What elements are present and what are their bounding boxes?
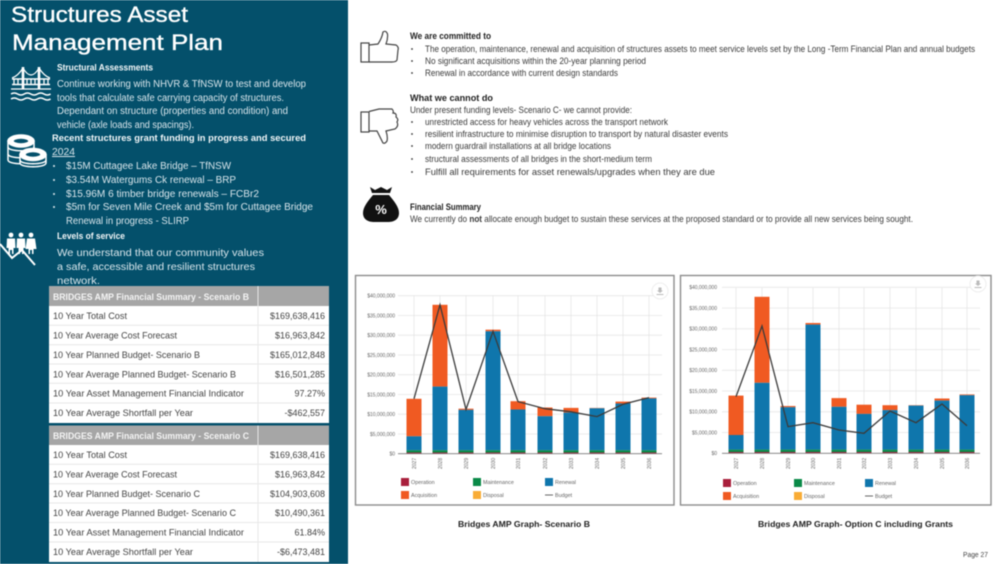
stacked bars xyxy=(406,305,656,454)
x axis years: 2031 xyxy=(837,458,843,469)
text block: what we cannot do: Fulfill all requirements for asset renewals/upgrades when they are due xyxy=(425,167,715,177)
table: scenario B financial summary xyxy=(49,286,329,423)
x axis years: 2035 xyxy=(621,458,627,469)
stacked bars xyxy=(728,297,974,453)
text block: grant funding: $15.96M 6 timber bridge renewals – FCBr2 xyxy=(66,189,259,200)
legend: Acquisition xyxy=(733,494,759,500)
x axis years: 2034 xyxy=(914,458,920,469)
table: scenario B financial summary: $169,638,416 xyxy=(270,311,325,321)
text block: grant funding: Recent structures grant funding in progress and secured xyxy=(52,133,306,144)
table: scenario B financial summary: BRIDGES AMP Financial Summary - Scenario B xyxy=(53,292,249,303)
text block: what we cannot do: modern guardrail installations at all bridge locations xyxy=(425,141,611,151)
table: scenario B financial summary: 10 Year Total Cost xyxy=(53,311,128,321)
title: Structures Asset xyxy=(11,2,189,27)
text block: structural assessments xyxy=(57,62,306,131)
table: scenario C financial summary: 10 Year Average Cost Forecast xyxy=(53,470,177,480)
text block: grant funding: Renewal in progress - SLIRP xyxy=(66,216,189,227)
page number: Page 27 xyxy=(963,552,988,559)
y axis labels: $40,000,000 xyxy=(689,285,717,291)
budget line xyxy=(414,305,649,417)
legend xyxy=(401,478,576,499)
legend: Budget xyxy=(555,493,573,499)
icon: download button xyxy=(652,283,668,299)
text block: grant funding xyxy=(52,133,313,227)
table: scenario B financial summary: 10 Year Planned Budget- Scenario B xyxy=(53,350,200,360)
title: Management Plan xyxy=(12,30,223,55)
y axis labels: $30,000,000 xyxy=(689,327,717,333)
legend: Disposal xyxy=(483,493,504,499)
legend: Maintenance xyxy=(804,481,835,487)
legend: Operation xyxy=(411,480,435,486)
text block: financial summary xyxy=(410,202,913,224)
icon: money bag with percent: % xyxy=(375,202,387,217)
text block: financial summary: We currently do not allocate enough budget to sustain these services at the proposed standard or to provide all new services being sought. xyxy=(410,214,913,224)
x axis years: 2029 xyxy=(786,458,792,469)
y axis labels: $5,000,000 xyxy=(370,432,395,438)
text block: structural assessments: Structural Assessments xyxy=(57,62,153,74)
icon: coins xyxy=(8,135,46,167)
text block: what we cannot do: What we cannot do xyxy=(410,93,493,104)
table: scenario C financial summary: 10 Year Total Cost xyxy=(53,450,128,460)
text block: what we cannot do: resilient infrastructure to minimise disruption to transport by natural disaster events xyxy=(425,129,728,139)
x axis years: 2029 xyxy=(464,458,470,469)
icon: download button xyxy=(970,276,986,292)
table: scenario C financial summary: $104,903,608 xyxy=(270,489,325,499)
x axis years: 2030 xyxy=(811,458,817,469)
x axis years: 2031 xyxy=(516,458,522,469)
icon: thumbs down xyxy=(361,109,398,143)
legend: Operation xyxy=(733,481,757,487)
x axis years xyxy=(412,458,653,469)
text block: financial summary: Financial Summary xyxy=(410,202,482,213)
y axis labels xyxy=(367,294,395,458)
text block: structural assessments: Dependant on structure (properties and condition) and xyxy=(57,106,288,117)
text block: levels of service: Levels of service xyxy=(57,231,125,242)
table: scenario B financial summary: 10 Year Average Shortfall per Year xyxy=(53,408,193,418)
icon: bridge xyxy=(11,67,51,100)
icon: thumbs up xyxy=(361,31,398,62)
text block: structural assessments: tools that calculate safe carrying capacity of structures. xyxy=(57,93,284,104)
x axis years: 2032 xyxy=(543,458,549,469)
table: scenario C financial summary: 10 Year Average Planned Budget- Scenario C xyxy=(53,508,236,518)
text block: grant funding: $5m for Seven Mile Creek and $5m for Cuttagee Bridge xyxy=(66,202,313,213)
table: scenario C financial summary: 10 Year Planned Budget- Scenario C xyxy=(53,489,200,499)
text block: we are committed to: No significant acquisitions within the 20-year planning period xyxy=(425,56,646,66)
table: scenario C financial summary xyxy=(49,426,329,562)
legend: Renewal xyxy=(875,481,896,487)
y axis labels: $15,000,000 xyxy=(689,389,717,395)
table: scenario C financial summary: 10 Year Asset Management Financial Indicator xyxy=(53,528,244,538)
x axis years: 2027 xyxy=(412,458,418,469)
text block: grant funding: 2024 xyxy=(52,147,75,158)
caption: scenario B graph: Bridges AMP Graph- Scenario B xyxy=(458,519,590,529)
table: scenario B financial summary: 10 Year Average Planned Budget- Scenario B xyxy=(53,370,236,380)
table: scenario C financial summary: 61.84% xyxy=(294,528,325,538)
y axis labels: $35,000,000 xyxy=(367,313,395,319)
chart: scenario B xyxy=(356,276,674,505)
x axis years: 2028 xyxy=(438,458,444,469)
caption: option C graph: Bridges AMP Graph- Option C including Grants xyxy=(758,519,953,529)
chart: option C including grants xyxy=(680,276,991,505)
text block: we are committed to: We are committed to xyxy=(410,31,491,42)
table: scenario B financial summary: 97.27% xyxy=(294,388,325,398)
text block: what we cannot do: Under present funding levels- Scenario C- we cannot provide: xyxy=(410,105,632,115)
y axis labels: $0 xyxy=(711,451,717,457)
text block: levels of service xyxy=(57,231,264,287)
table: scenario C financial summary: $10,490,361 xyxy=(275,508,325,518)
text block: levels of service: a safe, accessible and resilient structures xyxy=(57,262,255,273)
table: scenario C financial summary: BRIDGES AMP Financial Summary - Scenario C xyxy=(53,431,249,442)
x axis years: 2030 xyxy=(491,458,497,469)
title xyxy=(11,2,223,55)
y axis labels xyxy=(689,285,717,457)
x axis years: 2033 xyxy=(888,458,894,469)
x axis years: 2033 xyxy=(569,458,575,469)
y axis labels: $30,000,000 xyxy=(367,333,395,339)
x axis years: 2028 xyxy=(760,458,766,469)
y axis labels: $25,000,000 xyxy=(367,353,395,359)
y axis labels: $10,000,000 xyxy=(689,410,717,416)
text block: levels of service: We understand that our community values xyxy=(57,248,264,259)
x axis years xyxy=(734,458,971,469)
table: scenario B financial summary: $165,012,848 xyxy=(270,350,325,360)
text block: what we cannot do: structural assessments of all bridges in the short-medium term xyxy=(425,154,652,164)
table: scenario C financial summary: 10 Year Average Shortfall per Year xyxy=(53,547,193,557)
legend: Disposal xyxy=(804,494,825,500)
y axis labels: $40,000,000 xyxy=(367,294,395,300)
icon: money bag with percent xyxy=(363,187,399,222)
legend: Acquisition xyxy=(411,493,437,499)
table: scenario B financial summary: $16,963,842 xyxy=(275,330,325,340)
x axis years: 2036 xyxy=(647,458,653,469)
x axis years: 2034 xyxy=(595,458,601,469)
y axis labels: $5,000,000 xyxy=(692,430,717,436)
y axis labels: $20,000,000 xyxy=(689,368,717,374)
y axis labels: $25,000,000 xyxy=(689,347,717,353)
text block: structural assessments: Continue working with NHVR & TfNSW to test and develop xyxy=(57,79,306,90)
y axis labels: $20,000,000 xyxy=(367,372,395,378)
table: scenario C financial summary: $16,963,842 xyxy=(275,470,325,480)
table: scenario C financial summary: $169,638,416 xyxy=(270,450,325,460)
x axis years: 2036 xyxy=(965,458,971,469)
legend: Maintenance xyxy=(483,480,514,486)
panel: left sidebar xyxy=(0,0,348,564)
y axis labels: $10,000,000 xyxy=(367,412,395,418)
text block: we are committed to: Renewal in accordance with current design standards xyxy=(425,68,618,78)
legend: Renewal xyxy=(555,480,576,486)
x axis years: 2032 xyxy=(862,458,868,469)
table: scenario B financial summary: $16,501,285 xyxy=(275,370,325,380)
budget line xyxy=(736,326,967,433)
x axis years: 2035 xyxy=(940,458,946,469)
table: scenario C financial summary: -$6,473,481 xyxy=(277,547,325,557)
text block: levels of service: network. xyxy=(57,276,100,287)
text block: what we cannot do: unrestricted access for heavy vehicles across the transport network xyxy=(425,117,668,127)
x axis years: 2027 xyxy=(734,458,740,469)
table: scenario B financial summary: 10 Year Asset Management Financial Indicator xyxy=(53,388,244,398)
icon: community with declining line xyxy=(0,233,36,265)
legend xyxy=(723,479,896,500)
y axis labels: $15,000,000 xyxy=(367,392,395,398)
text block: structural assessments: vehicle (axle loads and spacings). xyxy=(57,120,194,131)
y axis labels: $35,000,000 xyxy=(689,306,717,312)
text block: grant funding: $3.54M Watergums Ck renewal – BRP xyxy=(66,175,236,186)
table: scenario B financial summary: 10 Year Average Cost Forecast xyxy=(53,330,177,340)
text block: what we cannot do xyxy=(410,93,728,177)
table: scenario B financial summary: -$462,557 xyxy=(284,408,325,418)
legend: Budget xyxy=(875,494,893,500)
text block: grant funding: $15M Cuttagee Lake Bridge – TfNSW xyxy=(66,161,232,172)
y axis labels: $0 xyxy=(389,452,395,458)
text block: we are committed to xyxy=(410,31,975,78)
